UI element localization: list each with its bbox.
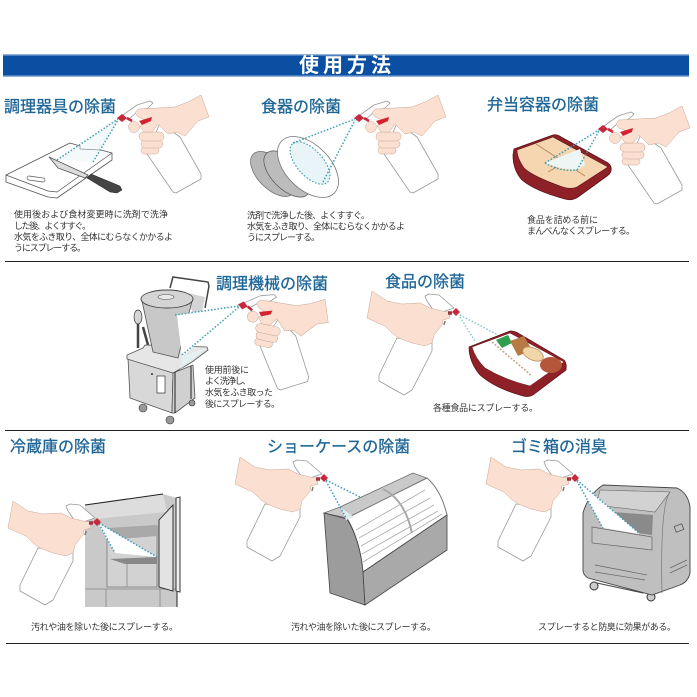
icon: bento with food	[469, 331, 566, 396]
description: 食品を詰める前に	[527, 214, 598, 225]
heading: ゴミ箱の消臭	[511, 437, 607, 456]
panel: bento containers	[487, 96, 690, 236]
panel: trash bin	[486, 437, 690, 632]
icon: bento box	[513, 135, 611, 200]
spray cone	[293, 119, 355, 182]
icon: hand with spray bottle	[117, 95, 209, 193]
description: 使用前後に	[205, 364, 249, 375]
icon: hand with spray bottle	[8, 501, 101, 605]
panel: dishes	[243, 95, 446, 242]
heading: 冷蔵庫の除菌	[10, 438, 106, 456]
icon: display case	[324, 473, 447, 605]
description: した後、よくすすぐ。	[14, 220, 91, 231]
description: 水気をふき取った	[205, 386, 273, 398]
spray cone	[99, 523, 157, 557]
heading: ショーケースの除菌	[267, 438, 410, 456]
heading: 調理機械の除菌	[216, 275, 328, 293]
description: 後にスプレーする。	[205, 398, 280, 409]
panel: refrigerator	[8, 438, 180, 632]
description: スプレーすると防臭に効果がある。	[538, 621, 676, 632]
heading: 調理器具の除菌	[4, 98, 116, 116]
panel: showcase	[235, 438, 447, 632]
description: 水気をふき取り、全体にむらなくかかるよ	[247, 220, 405, 232]
heading: 食品の除菌	[385, 273, 465, 291]
description: うにスプレーする。	[247, 232, 320, 242]
heading: 食器の除菌	[261, 98, 341, 116]
icon: trash bin	[575, 478, 690, 601]
icon: hand with spray bottle	[367, 291, 460, 395]
spray cone	[57, 118, 120, 162]
header bar	[3, 54, 689, 77]
panel: food	[367, 273, 566, 413]
description: 汚れや油を除いた後にスプレーする。	[291, 621, 436, 632]
icon: hand with spray bottle	[486, 457, 579, 561]
spray cone	[577, 480, 640, 534]
icon: cutting board and knife	[6, 143, 122, 198]
panel: cooking utensils	[4, 95, 209, 253]
panel: cooking machine	[127, 275, 333, 424]
description: 使用後および食材変更時に洗剤で洗浄	[14, 208, 168, 220]
description: 洗剤で洗浄した後、よくすすぐ。	[247, 210, 370, 220]
heading: 弁当容器の除菌	[487, 96, 599, 114]
description: うにスプレーする。	[14, 243, 86, 253]
icon: plates	[243, 125, 350, 209]
icon: cooking machine	[127, 277, 241, 424]
description: 汚れや油を除いた後にスプレーする。	[31, 621, 178, 632]
icon: refrigerator	[85, 494, 180, 607]
icon: hand with spray bottle	[354, 95, 446, 193]
description: 水気をふき取り、全体にむらなくかかるよ	[14, 231, 173, 242]
description: よく洗浄し、	[205, 375, 251, 386]
spray cone	[326, 480, 360, 518]
icon: hand with spray bottle	[222, 282, 333, 397]
spray cone	[545, 130, 599, 170]
description: 各種食品にスプレーする。	[433, 402, 538, 413]
title: 使用方法	[299, 54, 395, 77]
icon: hand with spray bottle	[235, 457, 328, 561]
description: まんべんなくスプレーする。	[527, 226, 635, 236]
spray cone	[175, 306, 239, 355]
spray cone	[460, 315, 498, 341]
icon: hand with spray bottle	[598, 106, 690, 204]
